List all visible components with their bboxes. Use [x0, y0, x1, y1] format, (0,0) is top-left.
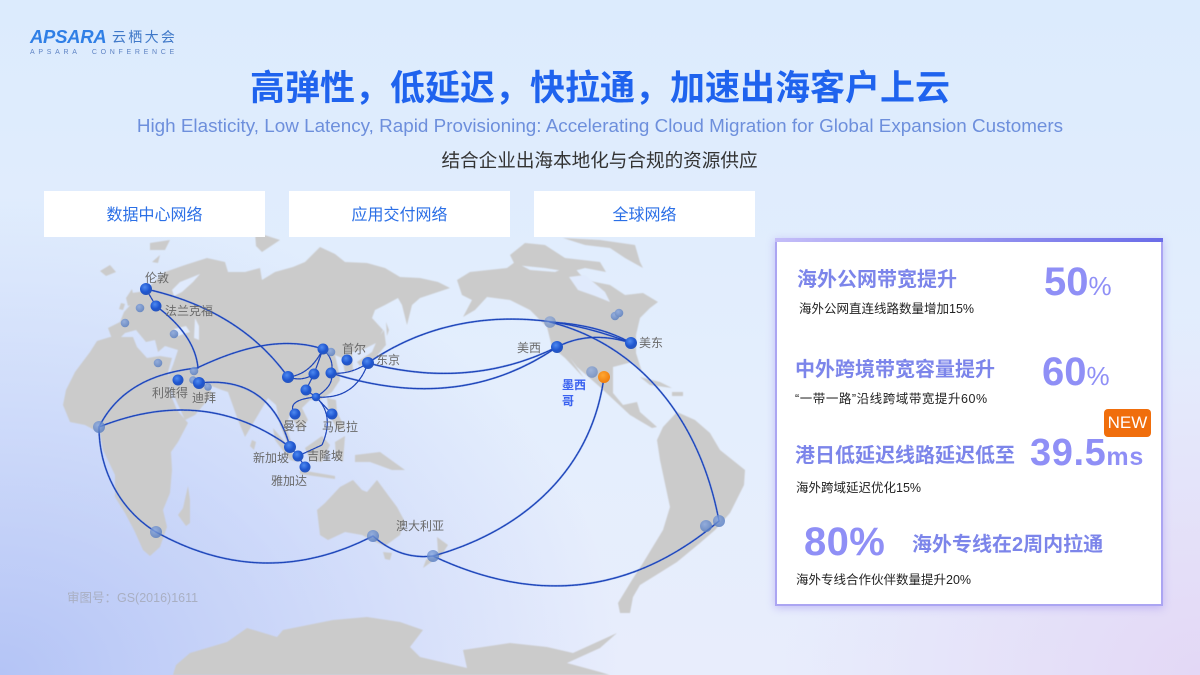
city labels: 利雅得 [152, 385, 188, 400]
Chinese subtitle: 结合企业出海本地化与合规的资源供应 [441, 150, 758, 171]
metric: private line: 海外专线合作伙伴数量提升20% [796, 573, 971, 587]
South America [618, 412, 745, 613]
metric: cross-border capacity: “一带一路”沿线跨域带宽提升60% [795, 392, 988, 406]
Canadian Arctic islands [510, 243, 606, 272]
badge: NEW: NEW [1108, 413, 1147, 432]
city labels: 伦敦 [145, 270, 169, 285]
panel: overseas network metrics [775, 238, 1163, 606]
North America [457, 262, 658, 428]
city labels: 法兰克福 [165, 303, 213, 318]
city labels: 雅加达 [271, 473, 307, 488]
tab: application delivery network: 应用交付网络 [351, 207, 448, 224]
metric: HK-Japan latency [795, 432, 1144, 495]
city labels: 澳大利亚 [396, 519, 444, 533]
title: 高弹性，低延迟，快拉通，加速出海客户上云 [250, 69, 950, 108]
Tasmania and New Zealand [383, 537, 448, 568]
tab: application delivery network [289, 191, 510, 237]
metric: cross-border capacity [795, 350, 1110, 406]
logo: APSARA [30, 26, 106, 47]
landmasses [63, 232, 745, 675]
tab: global network [534, 191, 755, 237]
city labels: 新加坡 [253, 450, 289, 465]
logo: 云栖大会 [112, 29, 177, 45]
logo: APSARA CONFERENCE [30, 49, 178, 56]
metric: private line [796, 520, 1103, 587]
logo [30, 26, 178, 56]
metric: HK-Japan latency: 港日低延迟线路延迟低至 [795, 445, 1015, 467]
city labels: 美西 [517, 341, 541, 355]
metric: HK-Japan latency: 海外跨域延迟优化15% [796, 481, 921, 495]
city labels: 迪拜 [192, 391, 216, 405]
tab: data center network [44, 191, 265, 237]
inland seas [172, 274, 610, 340]
metric: HK-Japan latency: 39.5ms [1030, 432, 1144, 474]
Mexico label: 墨西 [562, 378, 586, 392]
Greenland [563, 238, 643, 268]
metric: cross-border capacity: 中外跨境带宽容量提升 [795, 359, 995, 381]
city labels: 曼谷 [283, 419, 307, 433]
solid halo [99, 289, 719, 586]
panel top bar [775, 238, 1163, 242]
tab: data center network: 数据中心网络 [106, 207, 202, 224]
map approval number: 审图号：GS(2016)1611 [67, 590, 198, 605]
metric: public bandwidth: 海外公网带宽提升 [797, 269, 957, 291]
city labels: 美东 [639, 336, 663, 350]
metric: public bandwidth: 海外公网直连线路数量增加15% [799, 302, 974, 316]
Antarctica [173, 617, 617, 675]
badge: NEW [1104, 409, 1151, 437]
metric: cross-border capacity: 60% [1042, 350, 1110, 394]
Australia [317, 480, 404, 546]
route lines [99, 289, 719, 586]
dark dashes [99, 289, 719, 586]
faint nodes [93, 304, 725, 562]
English subtitle: High Elasticity, Low Latency, Rapid Provisioning: Accelerating Cloud Migration for Global Expansion Customers [137, 115, 1063, 136]
metric: public bandwidth [797, 260, 1112, 316]
metric: public bandwidth: 50% [1044, 260, 1112, 304]
Mexico node [598, 371, 610, 383]
city labels [145, 270, 663, 533]
tab: global network: 全球网络 [612, 207, 676, 224]
city labels: 首尔 [342, 341, 366, 356]
city labels: 吉隆坡 [307, 448, 343, 463]
Mexico label: 哥 [562, 394, 574, 408]
islands [100, 232, 683, 526]
city labels: 东京 [376, 353, 400, 367]
Africa [63, 337, 188, 556]
city labels: 马尼拉 [322, 419, 358, 434]
Eurasia [108, 247, 450, 452]
metric: private line: 海外专线在2周内拉通 [912, 534, 1103, 556]
metric: private line: 80% [804, 520, 885, 564]
main nodes [140, 283, 637, 472]
